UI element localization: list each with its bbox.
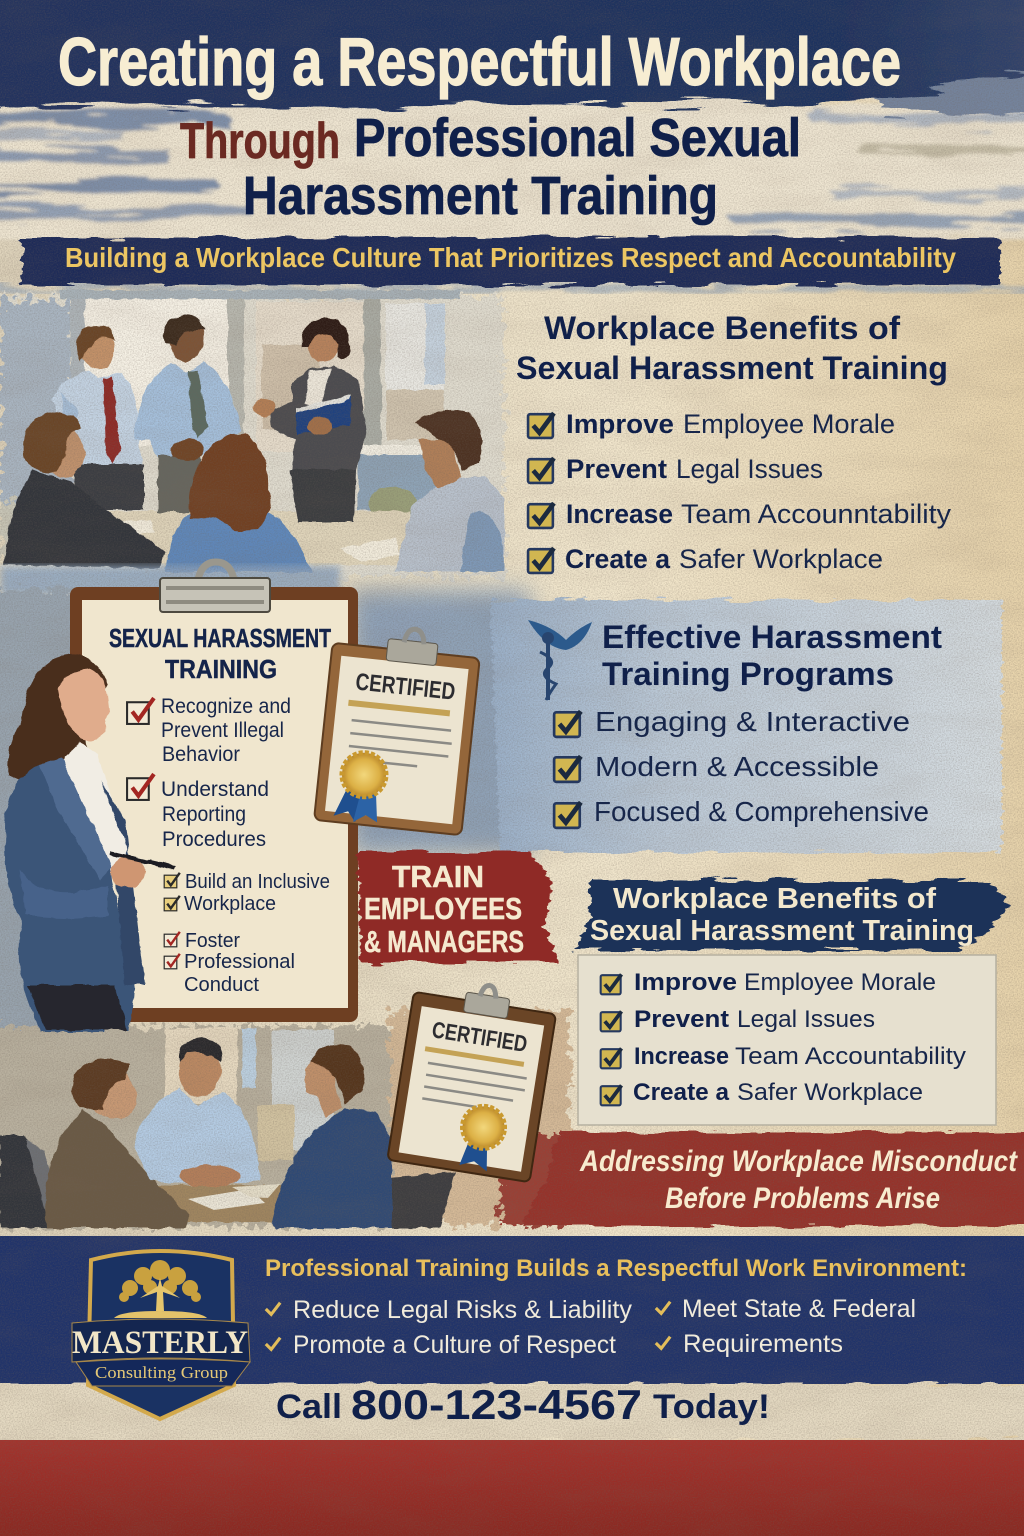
list item: improve morale: Employee Morale xyxy=(683,409,895,439)
certificate clipboard one xyxy=(314,621,482,835)
footer heading: Professional Training Builds a Respectful Work Environment: xyxy=(265,1255,967,1282)
logo: masterly shield: MASTERLY xyxy=(72,1325,248,1361)
list item: improve morale: Improve xyxy=(634,969,737,996)
panel: second benefits list xyxy=(578,955,996,1125)
footer list: Promote a Culture of Respect xyxy=(293,1331,616,1359)
list item: increase accountability: Team Accountability xyxy=(735,1043,966,1070)
blue haze below meeting scene xyxy=(0,566,340,596)
list item: improve morale: Improve xyxy=(566,409,674,439)
list item: prevent legal: Prevent xyxy=(634,1006,729,1033)
list item: recognize: Behavior xyxy=(162,743,240,766)
blue wash behind clipboards xyxy=(350,590,530,855)
footer list xyxy=(266,1295,916,1359)
subtitle: Harassment Training xyxy=(243,166,718,226)
illustration: office meeting scene xyxy=(0,290,505,576)
list item: improve morale xyxy=(601,969,936,996)
navy banner: workplace benefits: Workplace Benefits of xyxy=(613,883,936,915)
panel: effective training programs xyxy=(528,619,942,828)
heading: effective programs: Effective Harassment xyxy=(602,619,942,655)
grey wash left of clipboard xyxy=(0,590,80,1040)
list item: prevent legal issues: Prevent xyxy=(566,454,667,484)
person: standing man with red tie xyxy=(52,326,144,510)
heading: workplace benefits xyxy=(516,310,948,386)
call to action: 800-123-4567 xyxy=(351,1381,642,1428)
list item: conduct: Foster xyxy=(185,930,240,952)
misconduct banner text xyxy=(579,1145,1019,1215)
list item: increase accountability: Team Accounntability xyxy=(681,499,952,529)
subtitle streak background xyxy=(0,100,1024,240)
person: seated man right xyxy=(395,410,505,572)
list item: safer workplace: Create a xyxy=(565,544,671,574)
heading: workplace benefits: Sexual Harassment Training xyxy=(516,350,948,386)
certificate clip xyxy=(463,982,512,1019)
list item: prevent legal issues xyxy=(528,454,823,484)
list item: reporting: Understand xyxy=(161,778,269,801)
tagline: Building a Workplace Culture That Prioritizes Respect and Accountability xyxy=(65,242,956,273)
list item: engaging: Engaging & Interactive xyxy=(595,706,910,737)
footer navy band xyxy=(0,1236,1024,1384)
call to action xyxy=(276,1381,770,1428)
list item: conduct: Conduct xyxy=(184,974,259,996)
top navy header band xyxy=(0,0,1024,118)
certificate clipboard two xyxy=(387,974,559,1182)
illustration: three colleagues at table xyxy=(0,1010,570,1228)
list item: reporting xyxy=(127,774,269,851)
red banner: train employees: TRAIN xyxy=(392,859,484,894)
list item: safer workplace xyxy=(601,1079,923,1106)
footer list: Requirements xyxy=(683,1330,843,1358)
icon: golden tree xyxy=(114,1260,207,1318)
list item: increase accountability xyxy=(601,1043,966,1070)
list item: focused: Focused & Comprehensive xyxy=(594,796,929,827)
heading: workplace benefits: Workplace Benefits of xyxy=(544,310,900,346)
person: seated man left xyxy=(4,412,165,568)
list item: conduct: Professional xyxy=(184,951,295,973)
list item: increase accountability xyxy=(528,499,952,529)
bottom red band xyxy=(0,1440,1024,1536)
list item: improve morale: Employee Morale xyxy=(744,969,936,996)
person: man in brown jacket xyxy=(45,1058,190,1228)
person: standing man with grey tie xyxy=(134,315,242,512)
person: smiling man in blue shirt xyxy=(135,1038,260,1187)
list item: increase accountability: Increase xyxy=(634,1043,729,1070)
list item: prevent legal issues: Legal Issues xyxy=(676,454,823,484)
illustration: businesswoman with pen xyxy=(5,654,176,1032)
logo: masterly shield xyxy=(72,1251,250,1419)
person: seated woman centre xyxy=(165,434,312,572)
heading: effective programs: Training Programs xyxy=(602,656,894,692)
red banner background: addressing misconduct xyxy=(520,1132,1024,1226)
list item: safer workplace: Safer Workplace xyxy=(679,544,883,574)
heading: sexual harassment training: TRAINING xyxy=(165,654,277,684)
subtitle xyxy=(180,108,801,226)
list item: safer workplace: Safer Workplace xyxy=(737,1079,923,1106)
list item: improve morale xyxy=(528,409,895,439)
list item: recognize xyxy=(127,695,291,766)
panel: effective training programs background xyxy=(490,600,1002,852)
icon: caduceus xyxy=(528,620,592,700)
list item: prevent legal: Legal Issues xyxy=(737,1006,875,1033)
navy banner: workplace benefits xyxy=(575,880,1010,950)
list item: increase accountability: Increase xyxy=(566,499,673,529)
list item: recognize: Prevent Illegal xyxy=(161,719,284,742)
heading: sexual harassment training xyxy=(109,623,331,684)
list item: inclusive: Workplace xyxy=(184,893,276,915)
list item: reporting: Procedures xyxy=(162,828,266,851)
person: presenter woman with folder xyxy=(253,317,367,522)
call to action: Call xyxy=(276,1388,342,1426)
list item: inclusive xyxy=(164,871,330,915)
footer list: Reduce Legal Risks & Liability xyxy=(293,1296,633,1324)
list item: safer workplace xyxy=(528,544,883,574)
call band background xyxy=(0,1384,1024,1440)
list item: safer workplace: Create a xyxy=(633,1079,730,1106)
red banner: train employees xyxy=(358,852,558,962)
footer list: Meet State & Federal xyxy=(682,1295,916,1323)
call to action: Today! xyxy=(653,1388,770,1426)
medal xyxy=(456,1103,508,1173)
heading: effective programs xyxy=(602,619,942,692)
certificate clipboard two: CERTIFIED xyxy=(430,1016,529,1057)
list item: inclusive: Build an Inclusive xyxy=(185,871,330,893)
subtitle: Professional Sexual xyxy=(354,108,801,168)
panel: training clipboard xyxy=(70,562,358,1022)
logo: masterly shield: Consulting Group xyxy=(95,1363,228,1382)
navy subtitle banner xyxy=(22,237,1000,285)
person: man in navy suit xyxy=(271,1045,392,1228)
list item: recognize: Recognize and xyxy=(161,695,291,718)
red banner: train employees: & MANAGERS xyxy=(364,924,524,959)
certificate clipboard one: CERTIFIED xyxy=(354,668,457,706)
clipboard clip xyxy=(160,562,270,612)
subtitle: Through xyxy=(180,113,340,169)
streaks below subtitle banner xyxy=(0,284,1024,292)
panel: workplace benefits xyxy=(516,310,952,574)
heading: sexual harassment training: SEXUAL HARASSMENT xyxy=(109,623,331,653)
list item: prevent legal xyxy=(601,1006,875,1033)
certificate clip xyxy=(386,627,439,666)
list item: conduct xyxy=(164,930,295,996)
medal xyxy=(333,750,388,825)
list item: modern: Modern & Accessible xyxy=(595,751,879,782)
misconduct banner text: Before Problems Arise xyxy=(665,1182,940,1215)
navy banner: workplace benefits: Sexual Harassment Training xyxy=(590,915,974,947)
red banner: train employees: EMPLOYEES xyxy=(364,891,522,926)
list item: reporting: Reporting xyxy=(162,803,246,826)
